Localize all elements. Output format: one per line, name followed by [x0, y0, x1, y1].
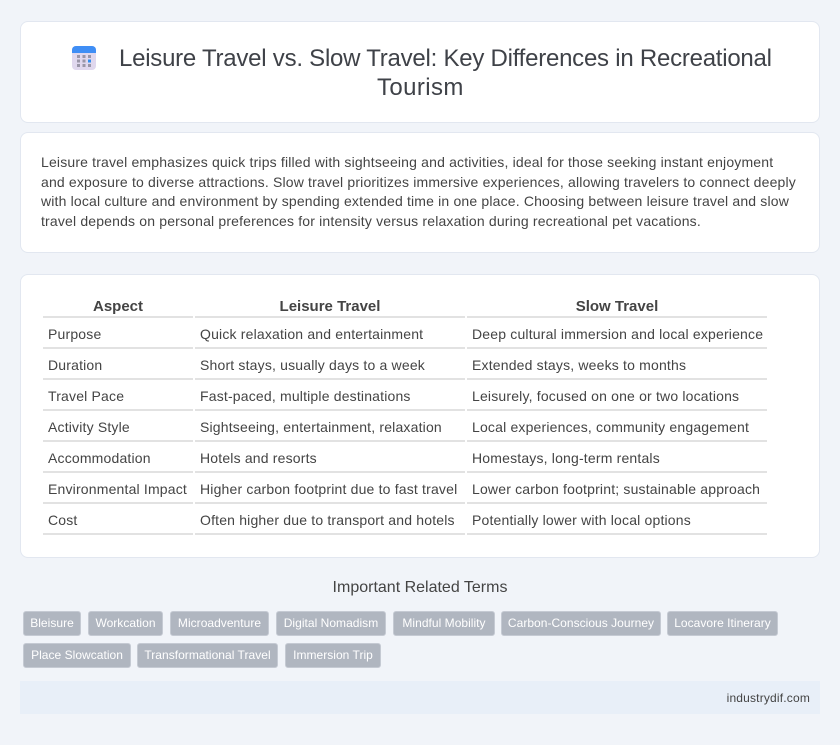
- heading: important related terms: Important Related Terms: [333, 579, 507, 596]
- tag: Transformational Travel: [144, 648, 271, 662]
- tag: Workcation: [95, 616, 156, 630]
- tag: Mindful Mobility: [402, 616, 486, 630]
- text block: introduction: with local culture and environment by spending extended time in one place. Choosing between leisure travel and slow: [41, 193, 789, 209]
- tag: Place Slowcation: [31, 648, 123, 662]
- title: [119, 45, 772, 101]
- comparison table: Extended stays, weeks to months: [472, 357, 686, 373]
- comparison table: Leisure Travel: [280, 298, 380, 315]
- tag: Locavore Itinerary: [674, 616, 771, 630]
- comparison table: Quick relaxation and entertainment: [200, 326, 423, 342]
- comparison table: Purpose: [48, 326, 101, 342]
- footer: industrydif.com: [727, 691, 810, 705]
- tag list: [23, 611, 778, 668]
- panel: introduction: [20, 132, 820, 253]
- comparison table: Activity Style: [48, 419, 130, 435]
- comparison table: Duration: [48, 357, 102, 373]
- comparison table: Often higher due to transport and hotels: [200, 512, 455, 528]
- tag: [88, 611, 163, 636]
- comparison table: [43, 298, 767, 535]
- tag: Bleisure: [30, 616, 74, 630]
- panel: comparison table: [20, 274, 820, 558]
- comparison table: Short stays, usually days to a week: [200, 357, 425, 373]
- comparison table: Slow Travel: [576, 298, 658, 315]
- tag: [285, 643, 381, 668]
- title: Leisure Travel vs. Slow Travel: Key Differences in Recreational: [119, 45, 772, 72]
- icon: calendar: [72, 46, 96, 70]
- comparison table: Potentially lower with local options: [472, 512, 691, 528]
- text block: introduction: [41, 154, 796, 229]
- tag: Microadventure: [178, 616, 261, 630]
- comparison table: Leisurely, focused on one or two locations: [472, 388, 739, 404]
- tag: Carbon-Conscious Journey: [508, 616, 654, 630]
- text block: introduction: Leisure travel emphasizes quick trips filled with sightseeing and activities, ideal for those seeking instant enjoyment: [41, 154, 773, 170]
- title: Tourism: [377, 74, 464, 101]
- comparison table: Sightseeing, entertainment, relaxation: [200, 419, 442, 435]
- comparison table: Travel Pace: [48, 388, 124, 404]
- tag: Immersion Trip: [293, 648, 373, 662]
- comparison table: Cost: [48, 512, 78, 528]
- comparison table: Aspect: [93, 298, 143, 315]
- tag: [667, 611, 778, 636]
- text block: introduction: and exposure to diverse attractions. Slow travel prioritizes immersive experiences, allowing travelers to connect deeply: [41, 174, 796, 190]
- comparison table: Fast-paced, multiple destinations: [200, 388, 411, 404]
- title card: [20, 21, 820, 123]
- comparison table: Hotels and resorts: [200, 450, 317, 466]
- tag: [393, 611, 495, 636]
- comparison table: Environmental Impact: [48, 481, 187, 497]
- comparison table: Accommodation: [48, 450, 151, 466]
- comparison table: Higher carbon footprint due to fast travel: [200, 481, 457, 497]
- tag: Digital Nomadism: [284, 616, 378, 630]
- tag: [276, 611, 386, 636]
- comparison table: Local experiences, community engagement: [472, 419, 749, 435]
- tag: [137, 643, 278, 668]
- tag: [23, 643, 131, 668]
- comparison table: Homestays, long-term rentals: [472, 450, 660, 466]
- tag: [23, 611, 81, 636]
- text block: introduction: travel depends on personal preferences for intensity versus relaxation during recreational pet vacations.: [41, 213, 701, 229]
- comparison table: Deep cultural immersion and local experience: [472, 326, 763, 342]
- tag: [170, 611, 269, 636]
- comparison table: Lower carbon footprint; sustainable approach: [472, 481, 760, 497]
- tag: [501, 611, 661, 636]
- footer: [20, 681, 820, 714]
